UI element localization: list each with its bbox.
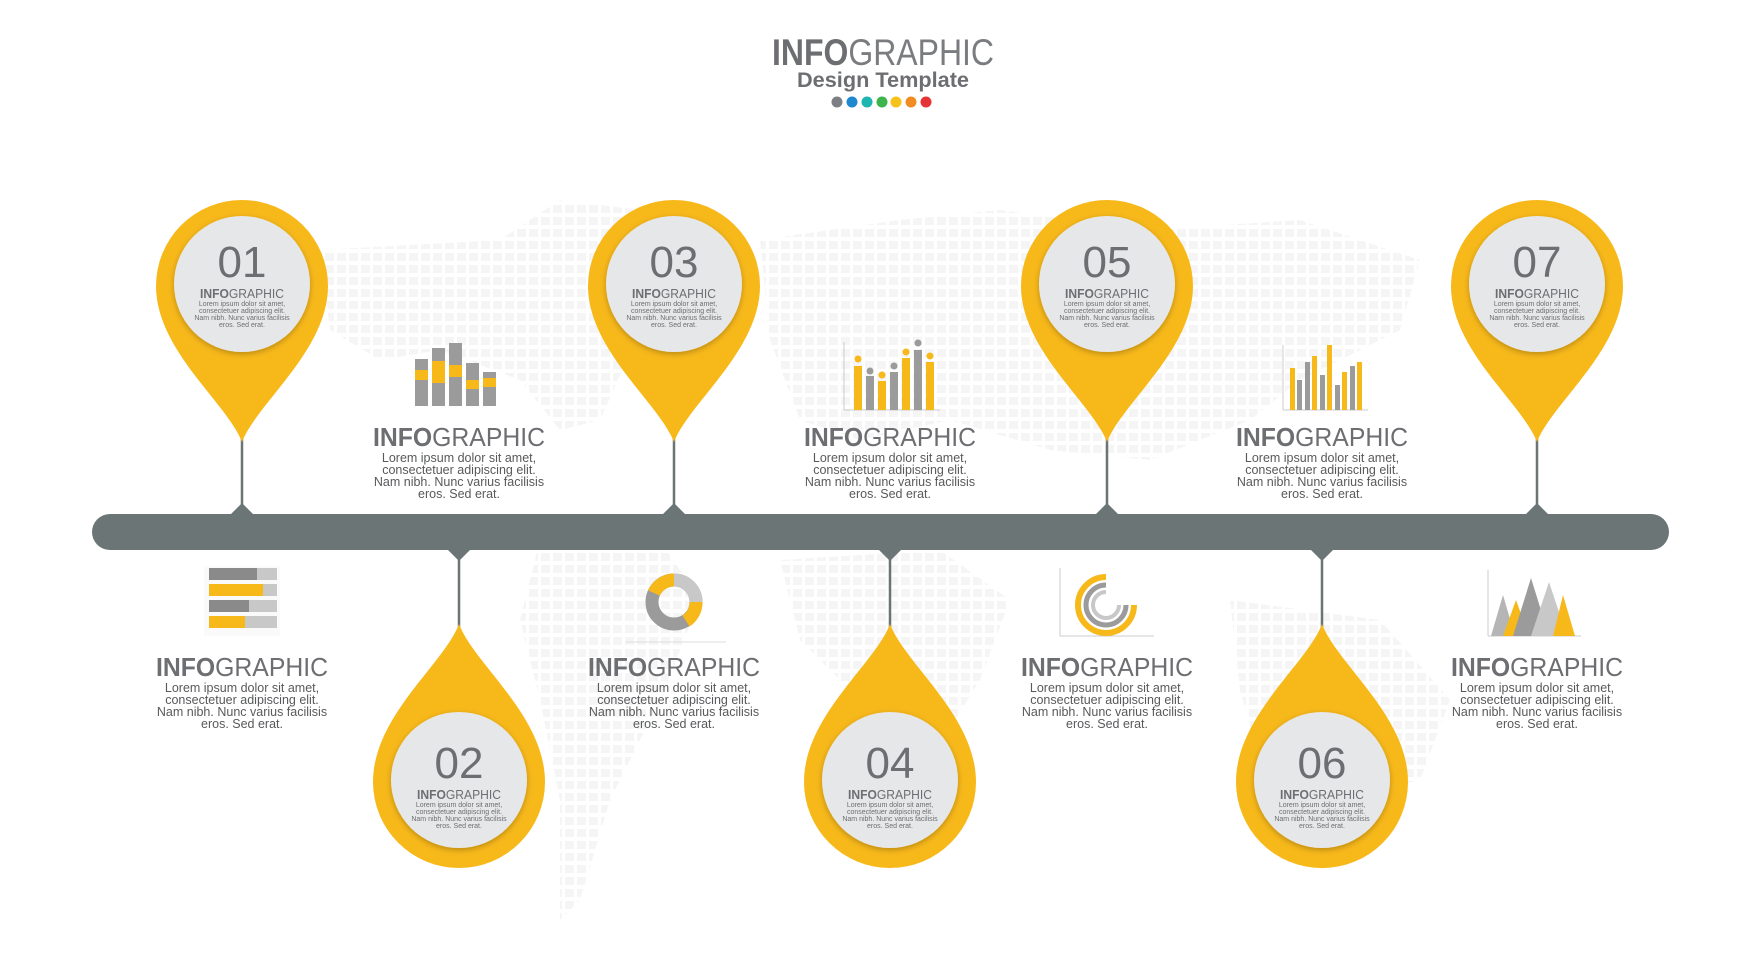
pin 07: INFOGRAPHIC <box>1495 286 1579 301</box>
text block: below 01: INFOGRAPHIC <box>156 652 328 682</box>
timeline bar <box>92 514 1669 550</box>
pin 06: consectetuer adipiscing elit. <box>1279 809 1365 816</box>
pin 06: Lorem ipsum dolor sit amet, <box>1279 802 1365 809</box>
text block: below 05 <box>1021 652 1193 731</box>
pin 03: Lorem ipsum dolor sit amet, <box>631 301 717 308</box>
text block: below 05: eros. Sed erat. <box>1066 717 1148 731</box>
pin 05: 05 <box>1083 238 1131 287</box>
text block: below 03: Lorem ipsum dolor sit amet, <box>597 681 751 695</box>
pin 01: consectetuer adipiscing elit. <box>199 308 285 315</box>
pin 03: eros. Sed erat. <box>651 322 697 329</box>
text block: below 07: consectetuer adipiscing elit. <box>1460 693 1614 707</box>
text block: below 01: Lorem ipsum dolor sit amet, <box>165 681 319 695</box>
pin 06: eros. Sed erat. <box>1299 823 1345 830</box>
pin 05 <box>1021 200 1193 442</box>
pin 07: consectetuer adipiscing elit. <box>1494 308 1580 315</box>
pin 05: eros. Sed erat. <box>1084 322 1130 329</box>
chart: thin bars (above 06) <box>1283 345 1368 410</box>
pin 01 <box>156 200 328 442</box>
pin 05: INFOGRAPHIC <box>1065 286 1149 301</box>
text block: below 01: eros. Sed erat. <box>201 717 283 731</box>
text block: below 05: consectetuer adipiscing elit. <box>1030 693 1184 707</box>
chart: peaks (below 07) <box>1488 570 1581 636</box>
text block: above 04: Nam nibh. Nunc varius facilisis <box>805 475 975 489</box>
pin 04: consectetuer adipiscing elit. <box>847 809 933 816</box>
pin 06: Nam nibh. Nunc varius facilisis <box>1274 816 1370 823</box>
text block: above 06: consectetuer adipiscing elit. <box>1245 463 1399 477</box>
text block: above 06: INFOGRAPHIC <box>1236 422 1408 452</box>
chart: donut (below 03) <box>626 580 726 642</box>
text block: below 07: eros. Sed erat. <box>1496 717 1578 731</box>
text block: below 03: eros. Sed erat. <box>633 717 715 731</box>
pin 02: eros. Sed erat. <box>436 823 482 830</box>
pin 04 <box>804 624 976 868</box>
text block: above 02 <box>373 422 545 501</box>
title <box>772 32 994 92</box>
pin 04: Lorem ipsum dolor sit amet, <box>847 802 933 809</box>
background world map <box>320 200 1450 920</box>
pin 02: INFOGRAPHIC <box>417 787 501 802</box>
title: Design Template <box>797 69 969 92</box>
pin 04: INFOGRAPHIC <box>848 787 932 802</box>
pin 02: Lorem ipsum dolor sit amet, <box>416 802 502 809</box>
text block: above 02: eros. Sed erat. <box>418 487 500 501</box>
pin 07: eros. Sed erat. <box>1514 322 1560 329</box>
pin 07 <box>1451 200 1623 442</box>
stems and connectors <box>230 438 1549 630</box>
pin 03 <box>588 200 760 442</box>
pin 03: consectetuer adipiscing elit. <box>631 308 717 315</box>
pin 03: INFOGRAPHIC <box>632 286 716 301</box>
pin 04: eros. Sed erat. <box>867 823 913 830</box>
text block: above 04: Lorem ipsum dolor sit amet, <box>813 451 967 465</box>
text block: below 03 <box>588 652 760 731</box>
text block: above 02: consectetuer adipiscing elit. <box>382 463 536 477</box>
text block: below 01: consectetuer adipiscing elit. <box>165 693 319 707</box>
text block: below 05: Lorem ipsum dolor sit amet, <box>1030 681 1184 695</box>
pin 07: Lorem ipsum dolor sit amet, <box>1494 301 1580 308</box>
pin 02 <box>373 624 545 868</box>
text block: above 06: Lorem ipsum dolor sit amet, <box>1245 451 1399 465</box>
title: INFOGRAPHIC <box>772 32 994 73</box>
pin 06 <box>1236 624 1408 868</box>
pin 03: Nam nibh. Nunc varius facilisis <box>626 315 722 322</box>
pin 04: Nam nibh. Nunc varius facilisis <box>842 816 938 823</box>
text block: below 05: Nam nibh. Nunc varius facilisis <box>1022 705 1192 719</box>
text block: below 03: Nam nibh. Nunc varius facilisis <box>589 705 759 719</box>
pin 01: INFOGRAPHIC <box>200 286 284 301</box>
pin 07: 07 <box>1513 238 1561 287</box>
text block: below 07: Nam nibh. Nunc varius facilisis <box>1452 705 1622 719</box>
text block: below 01 <box>156 652 328 731</box>
pin 06: 06 <box>1298 739 1346 788</box>
pin 02: 02 <box>435 739 483 788</box>
text block: below 05: INFOGRAPHIC <box>1021 652 1193 682</box>
text block: below 07: Lorem ipsum dolor sit amet, <box>1460 681 1614 695</box>
pin 01: Nam nibh. Nunc varius facilisis <box>194 315 290 322</box>
pin 02: Nam nibh. Nunc varius facilisis <box>411 816 507 823</box>
text block: below 03: consectetuer adipiscing elit. <box>597 693 751 707</box>
pin 01: 01 <box>218 238 266 287</box>
chart: bars with dots (above 04) <box>844 340 940 410</box>
text block: below 03: INFOGRAPHIC <box>588 652 760 682</box>
text block: below 07: INFOGRAPHIC <box>1451 652 1623 682</box>
pin 05: consectetuer adipiscing elit. <box>1064 308 1150 315</box>
text block: above 04: consectetuer adipiscing elit. <box>813 463 967 477</box>
pin 06: INFOGRAPHIC <box>1280 787 1364 802</box>
chart: people grid (below 01) <box>204 566 280 636</box>
color dots <box>832 96 932 108</box>
chart: stacked bars (above 02) <box>415 343 496 406</box>
pin 03: 03 <box>650 238 698 287</box>
text block: above 02: Lorem ipsum dolor sit amet, <box>382 451 536 465</box>
text block: above 02: Nam nibh. Nunc varius facilisis <box>374 475 544 489</box>
pin 02: consectetuer adipiscing elit. <box>416 809 502 816</box>
pin 07: Nam nibh. Nunc varius facilisis <box>1489 315 1585 322</box>
pin 05: Lorem ipsum dolor sit amet, <box>1064 301 1150 308</box>
chart: arcs (below 05) <box>1060 568 1154 636</box>
pin 04: 04 <box>866 739 914 788</box>
text block: above 06 <box>1236 422 1408 501</box>
pin 05: Nam nibh. Nunc varius facilisis <box>1059 315 1155 322</box>
pin 01: eros. Sed erat. <box>219 322 265 329</box>
text block: above 02: INFOGRAPHIC <box>373 422 545 452</box>
text block: above 06: eros. Sed erat. <box>1281 487 1363 501</box>
text block: above 06: Nam nibh. Nunc varius facilisis <box>1237 475 1407 489</box>
text block: below 01: Nam nibh. Nunc varius facilisis <box>157 705 327 719</box>
text block: above 04: eros. Sed erat. <box>849 487 931 501</box>
pin 01: Lorem ipsum dolor sit amet, <box>199 301 285 308</box>
text block: above 04 <box>804 422 976 501</box>
text block: below 07 <box>1451 652 1623 731</box>
text block: above 04: INFOGRAPHIC <box>804 422 976 452</box>
